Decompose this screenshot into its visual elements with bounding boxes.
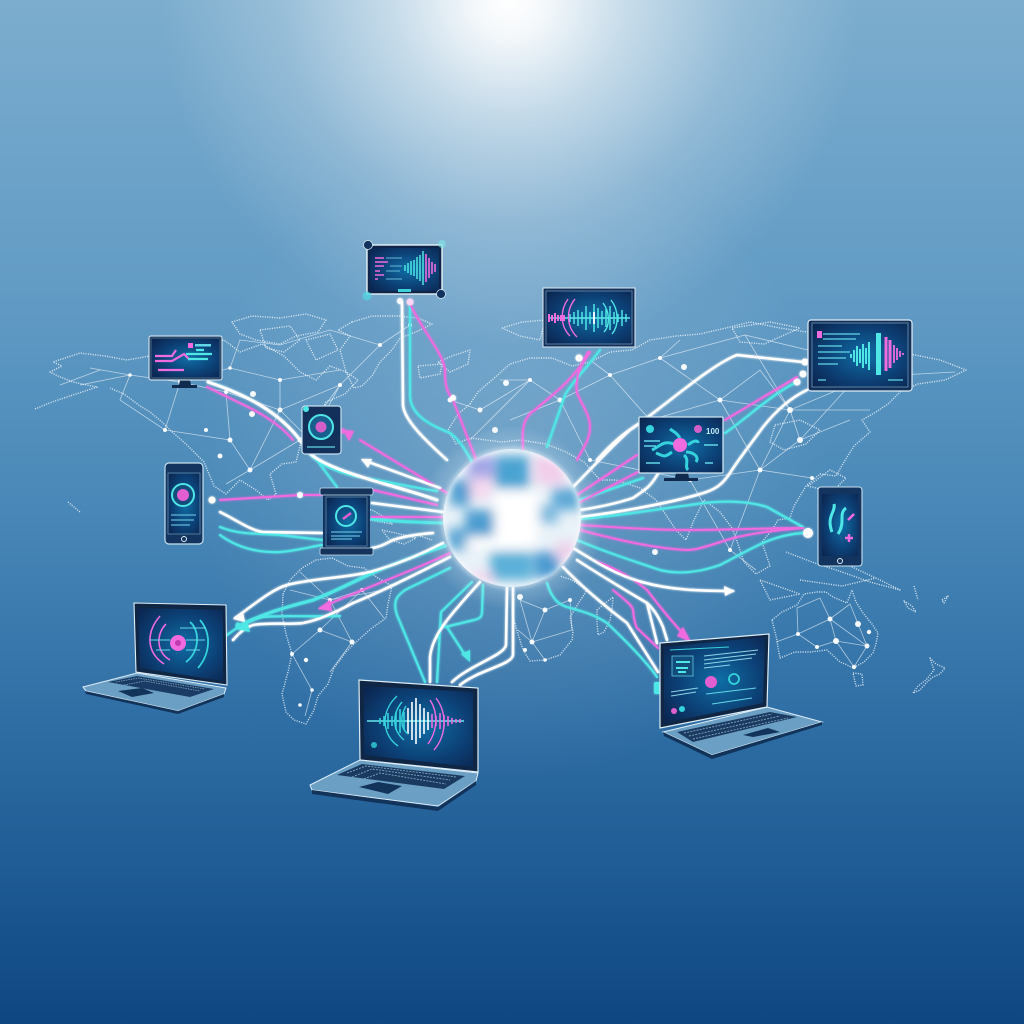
cyan links [210, 305, 803, 682]
device: left phone [165, 463, 203, 544]
stand [664, 473, 698, 481]
corner node: bottom right [436, 290, 446, 298]
device: right monitor [808, 320, 912, 391]
device: top center monitor [543, 288, 635, 347]
top light glow [0, 0, 1024, 400]
base [310, 760, 478, 806]
device: top monitor [362, 240, 446, 300]
world map network [35, 314, 966, 724]
signal arcs [562, 299, 577, 337]
device: left monitor [149, 336, 222, 388]
base [83, 673, 226, 711]
waveform [851, 342, 869, 370]
corner node: top right [438, 240, 446, 248]
dashboard [670, 647, 729, 650]
screen text lines [375, 258, 388, 279]
sphere rim [443, 449, 581, 587]
central blob icon [652, 429, 698, 470]
waveform [405, 251, 423, 285]
device: right phone [818, 487, 862, 566]
device: center right monitor [639, 417, 723, 481]
device: left laptop [83, 603, 227, 714]
corner node: bottom left [362, 292, 372, 300]
device: center left tablet [320, 488, 373, 555]
waveform [367, 720, 464, 722]
blurred sphere [442, 448, 582, 588]
device: right laptop [660, 634, 822, 759]
junction dots [208, 298, 813, 628]
arrowheads [233, 430, 735, 694]
magenta links [207, 304, 803, 648]
screen chart [155, 350, 190, 370]
screen [134, 603, 227, 685]
network links [60, 325, 955, 716]
screen text lines [818, 334, 903, 380]
connection lines [207, 298, 813, 694]
waveform [548, 317, 630, 319]
radar graphic [170, 635, 186, 651]
corner nodes [364, 240, 372, 250]
central sphere [424, 432, 600, 606]
keyboard [677, 712, 797, 742]
base [663, 707, 822, 755]
network nodes [128, 323, 871, 707]
screen [660, 634, 769, 728]
continent outlines [35, 314, 966, 724]
stand [172, 380, 197, 388]
white links [208, 302, 807, 685]
sphere halo [420, 426, 604, 610]
soft light behind map [0, 140, 1024, 780]
keyboard [108, 676, 214, 697]
screen [359, 680, 478, 772]
device: small tablet [302, 406, 341, 454]
device: bottom laptop [310, 680, 478, 811]
screen label: 100 [706, 427, 720, 436]
keyboard [337, 764, 465, 789]
